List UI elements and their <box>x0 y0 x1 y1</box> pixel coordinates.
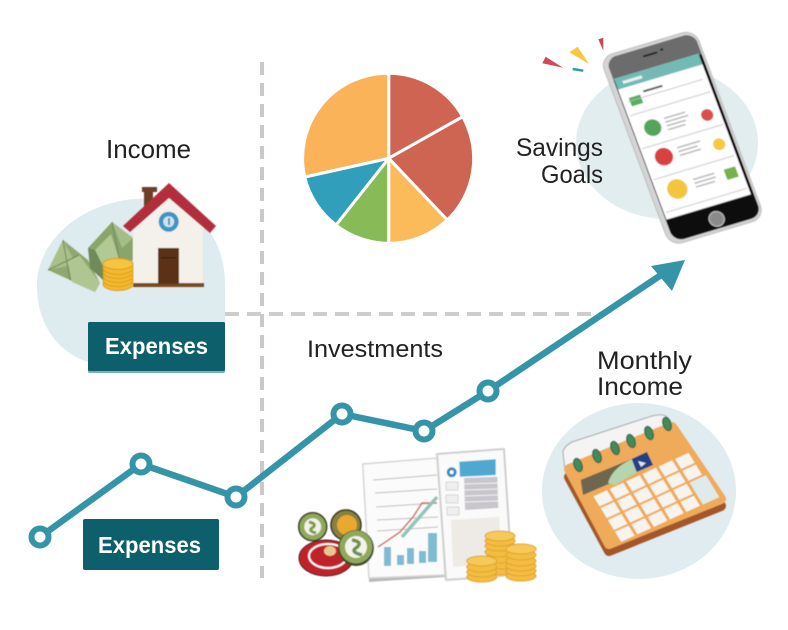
label: expenses (lower) <box>83 519 219 570</box>
heading: savings goals: Goals <box>541 161 603 189</box>
panel: income <box>37 134 225 373</box>
icon: casino-style tokens <box>299 510 374 576</box>
background circle <box>576 67 758 219</box>
heading: income: Income <box>106 134 191 164</box>
icon: house <box>123 183 216 287</box>
heading: monthly income: Income <box>597 373 683 401</box>
tablet <box>437 449 512 580</box>
heading: savings goals: Savings <box>516 134 603 162</box>
icon: gold coins <box>467 531 536 582</box>
label: expenses: Expenses <box>105 333 208 359</box>
chart: rising trend line with arrow <box>32 260 685 546</box>
panel: monthly income <box>542 347 736 579</box>
icon: confetti <box>542 38 603 71</box>
background circle <box>542 403 736 579</box>
report sheet <box>363 458 445 582</box>
chart: pie <box>303 73 474 243</box>
label: expenses <box>88 322 225 373</box>
icon: investment documents <box>299 449 536 582</box>
icon: money <box>48 222 133 292</box>
arrow head <box>651 260 685 291</box>
icon: smartphone <box>600 29 765 246</box>
heading: monthly income <box>597 347 693 401</box>
panel: savings goals <box>516 29 765 246</box>
heading: monthly income: Monthly <box>597 347 693 375</box>
label: expenses (lower): Expenses <box>98 532 201 558</box>
icon: coin stack <box>103 258 133 290</box>
icon: calendar <box>563 415 721 551</box>
heading: savings goals <box>516 134 603 189</box>
background blob <box>37 199 225 362</box>
heading: investments: Investments <box>307 336 443 363</box>
